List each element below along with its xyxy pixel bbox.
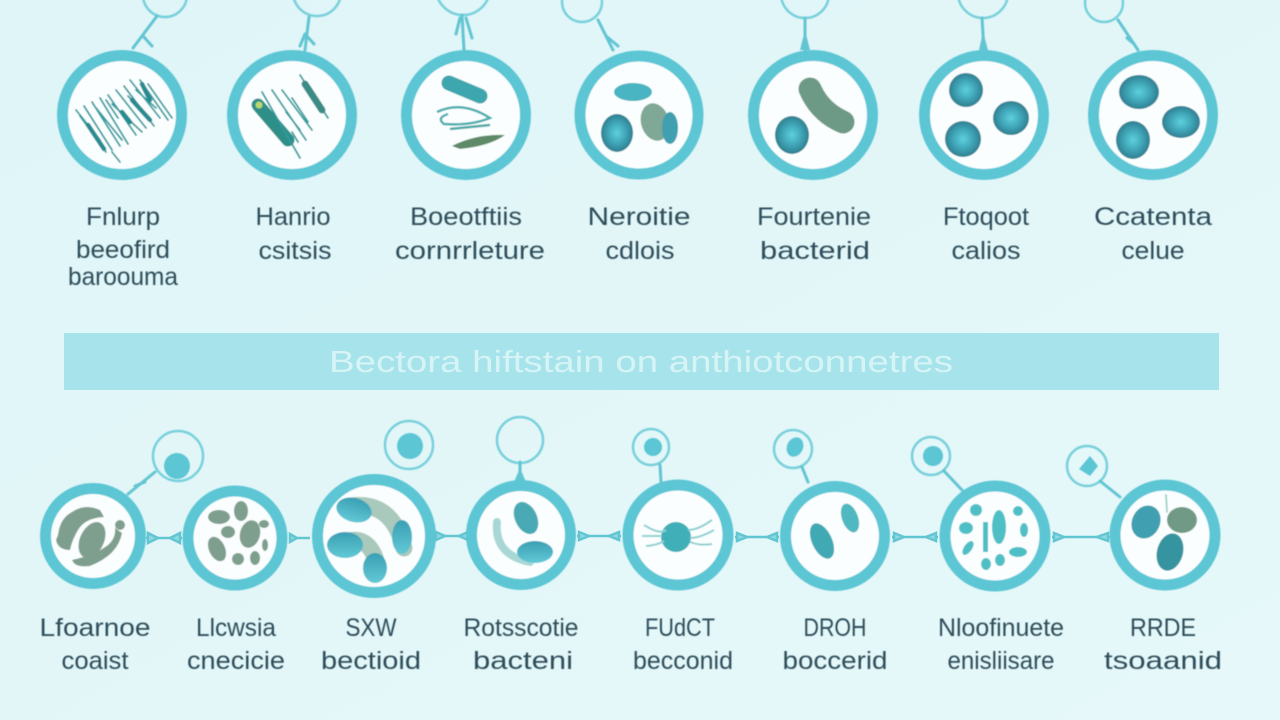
item 7 label bbox=[1094, 203, 1212, 265]
item 3: circle with rod, filament and dark strand bbox=[406, 0, 526, 174]
item 13: circle with two teal bacilli bbox=[774, 430, 884, 586]
item 12 label: FUdCT bbox=[645, 614, 715, 642]
bottom row panel bbox=[40, 417, 1222, 675]
item 4 label bbox=[588, 203, 690, 265]
item 15 label: tsoaanid bbox=[1104, 647, 1222, 675]
item 7: circle with three cocci bbox=[1085, 0, 1212, 174]
item 15 label bbox=[1104, 614, 1222, 675]
item 14 label bbox=[938, 614, 1064, 675]
item 2 label bbox=[256, 203, 332, 265]
item 15: circle with three seed-shaped cells bbox=[1067, 446, 1215, 585]
item 11 label: Rotsscotie bbox=[464, 614, 578, 642]
item 13 label: boccerid bbox=[782, 647, 888, 675]
item 2: circle with elongated bacillus bbox=[232, 0, 352, 174]
item 15 label: RRDE bbox=[1130, 614, 1196, 642]
item 6 label bbox=[943, 203, 1029, 265]
item 4 label: cdlois bbox=[606, 237, 674, 265]
item 10 label: bectioid bbox=[321, 647, 421, 675]
item 5 label: Fourtenie bbox=[757, 203, 871, 231]
item 5: circle with bean bacillus and coccus bbox=[754, 0, 872, 174]
item 9 label: Llcwsia bbox=[196, 614, 276, 642]
item 11 label bbox=[464, 614, 578, 675]
item 9 label: cnecicie bbox=[187, 647, 285, 675]
item 1: circle with rod-shaped strands bbox=[62, 0, 187, 174]
item 6: circle with three cocci bbox=[924, 0, 1044, 174]
item 11 label: bacteni bbox=[473, 647, 573, 675]
item 8 label: coaist bbox=[62, 647, 129, 675]
item 13 label bbox=[782, 614, 888, 675]
item 3 label bbox=[395, 203, 545, 265]
item 12 label bbox=[633, 614, 733, 675]
item 8 label: Lfoarnoe bbox=[40, 614, 150, 642]
item 14: circle with scattered teal shapes bbox=[912, 437, 1045, 586]
item 9 label bbox=[187, 614, 285, 675]
item 8 label bbox=[40, 614, 150, 675]
item 12 label: becconid bbox=[633, 647, 733, 675]
item 1 label: beeofird bbox=[76, 236, 170, 264]
item 13 label: DROH bbox=[804, 614, 866, 642]
item 5 label bbox=[757, 203, 871, 265]
item 3 label: cornrrleture bbox=[395, 237, 545, 265]
item 6 label: calios bbox=[952, 237, 1020, 265]
item 5 label: bacterid bbox=[760, 237, 870, 265]
item 10: circle with blue curved bacilli bbox=[318, 421, 433, 592]
item 14 label: Nloofinuete bbox=[938, 614, 1064, 642]
item 6 label: Ftoqoot bbox=[943, 203, 1029, 231]
item 10 label: SXW bbox=[346, 614, 397, 642]
item 1 label: Fnlurp bbox=[86, 203, 160, 231]
item 12: circle with flagellated coccus bbox=[628, 429, 728, 585]
item 7 label: celue bbox=[1122, 237, 1184, 265]
heading banner bbox=[64, 333, 1219, 390]
connectors between bottom circles bbox=[146, 532, 1110, 543]
item 7 label: Ccatenta bbox=[1094, 203, 1212, 231]
item 1 label: baroouma bbox=[68, 263, 178, 291]
heading text: Bectora hiftstain on anthiotconnetres bbox=[329, 344, 953, 379]
item 10 label bbox=[321, 614, 421, 675]
item 14 label: enisliisare bbox=[948, 647, 1054, 675]
item 1 label bbox=[68, 203, 178, 291]
item 9: circle with scattered green blobs bbox=[188, 491, 282, 585]
item 11: circle with curved bacteria bbox=[472, 417, 570, 584]
item 8: circle with green blobs bbox=[46, 431, 203, 584]
item 4: circle with mixed cells bbox=[562, 0, 698, 174]
item 2 label: Hanrio bbox=[256, 203, 330, 231]
item 4 label: Neroitie bbox=[588, 203, 690, 231]
item 3 label: Boeotftiis bbox=[410, 203, 522, 231]
top row panel bbox=[62, 0, 1212, 291]
item 2 label: csitsis bbox=[258, 237, 332, 265]
